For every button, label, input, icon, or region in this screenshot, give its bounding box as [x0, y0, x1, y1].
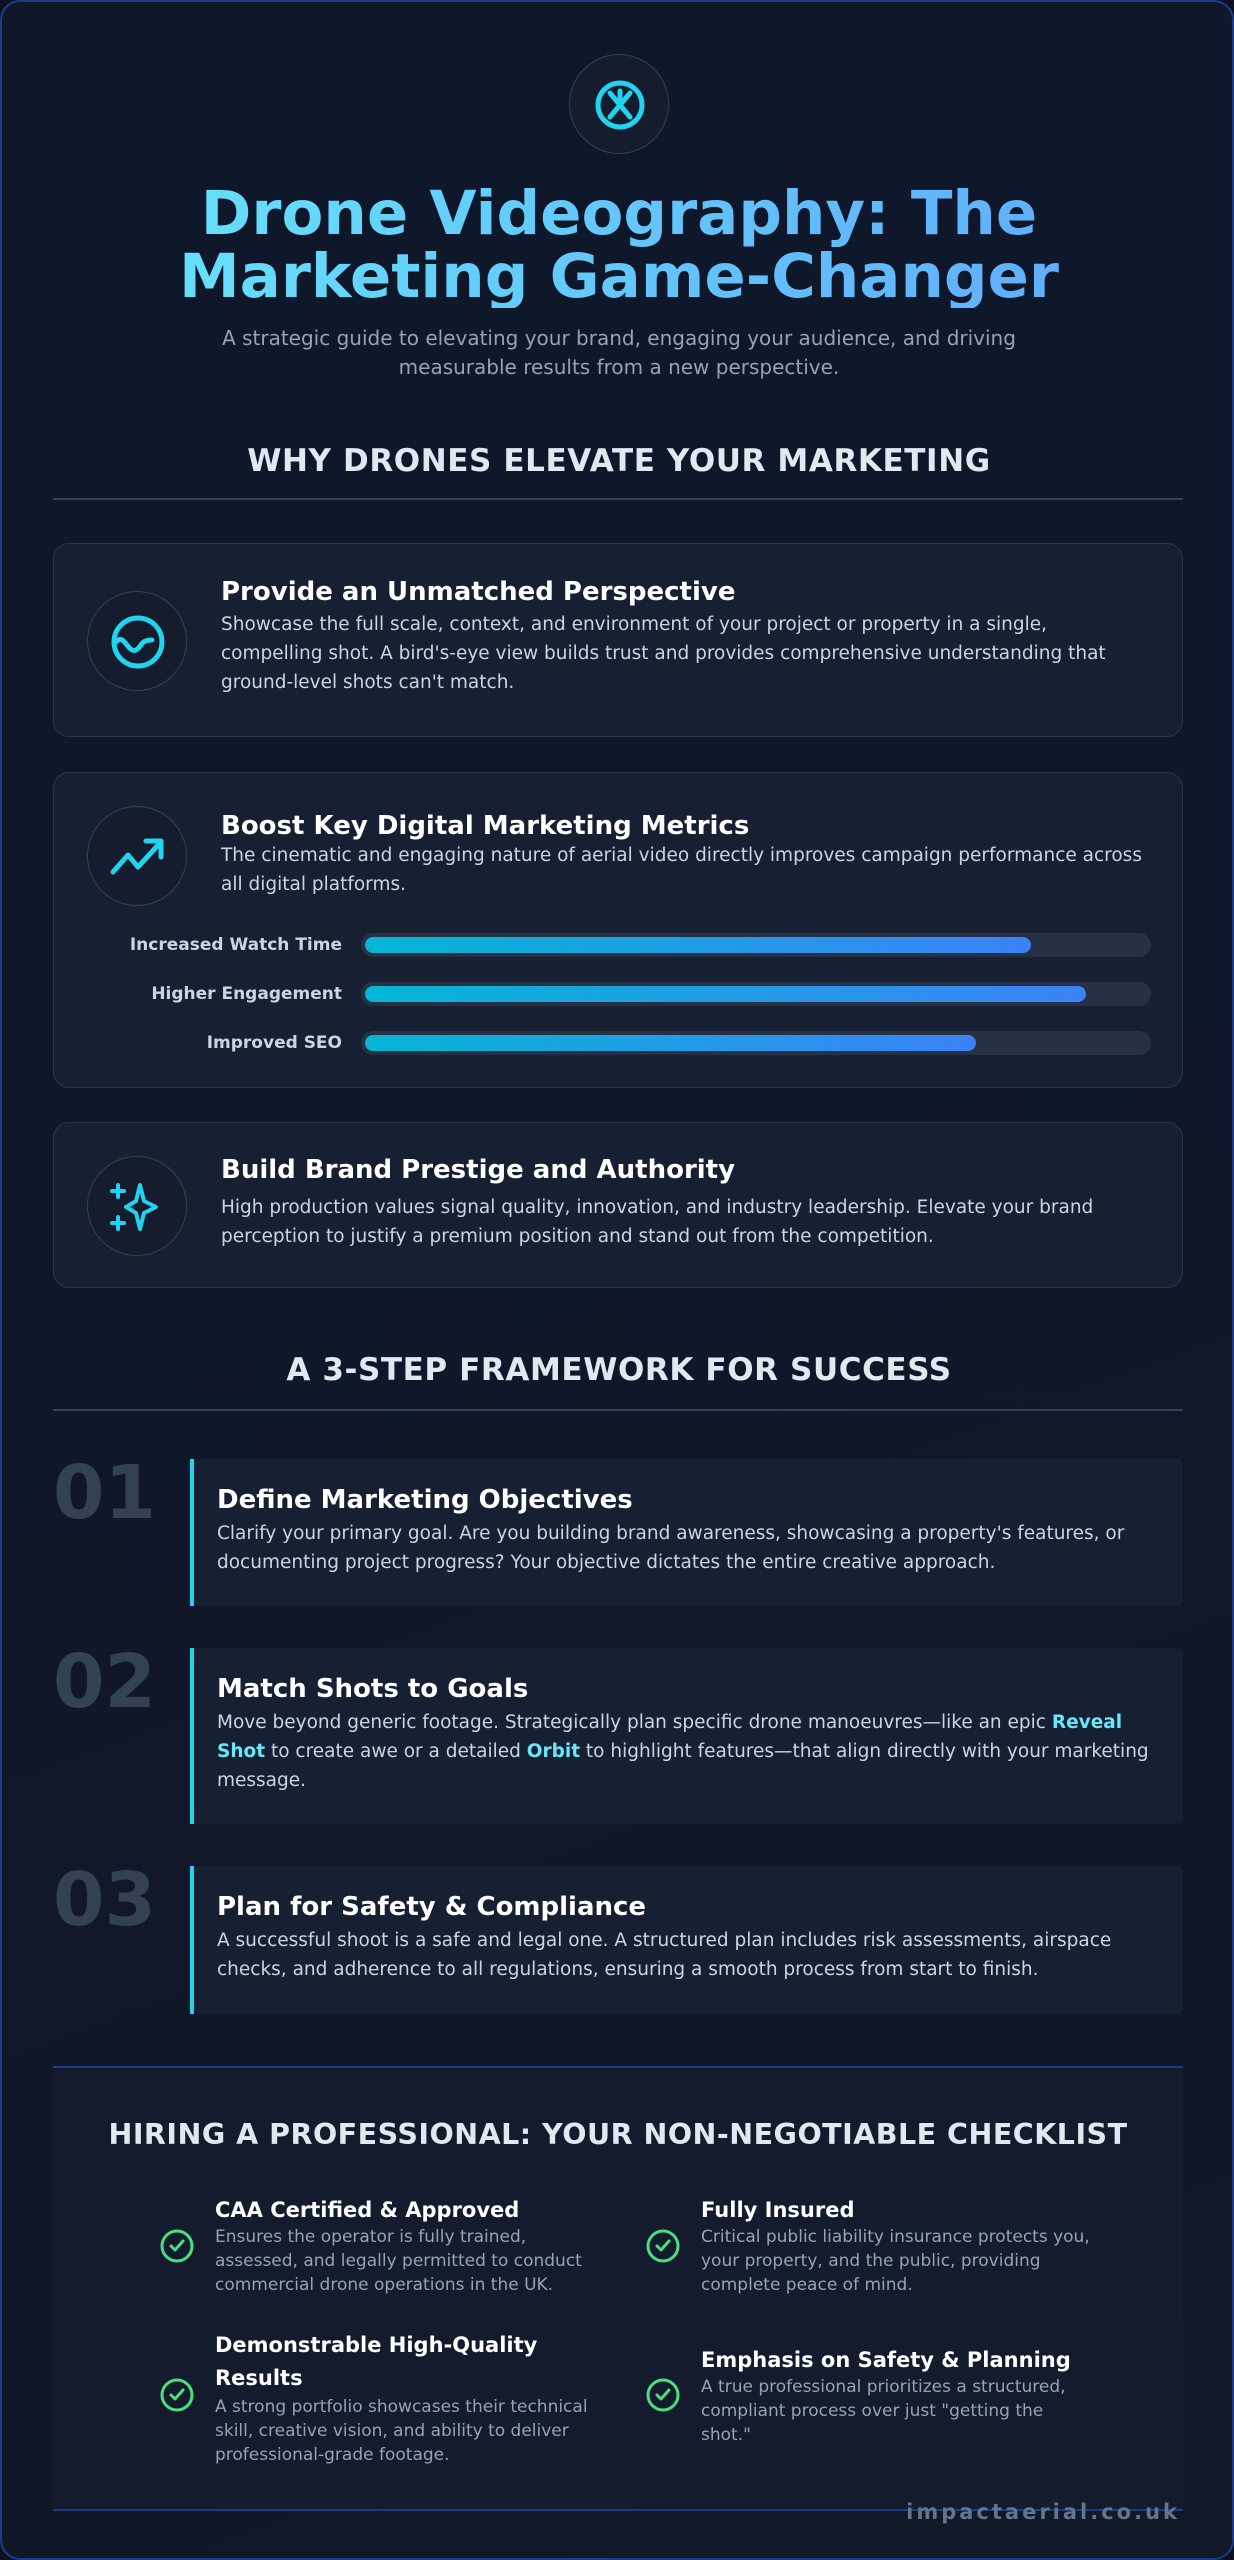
title: Marketing Game-Changer — [179, 241, 1059, 312]
text — [220, 811, 1142, 895]
icon: drone logo — [569, 54, 669, 154]
panel: brand prestige — [53, 1122, 1183, 1288]
subtitle: A strategic guide to elevating your brand, engaging your audience, and driving measurable results from a new perspective. — [222, 326, 1016, 379]
item: insured — [646, 2198, 1090, 2295]
heading: why drones: WHY DRONES ELEVATE YOUR MARKETING — [247, 443, 991, 479]
item: quality: Demonstrable High-Quality Results — [215, 2333, 537, 2390]
text: Showcase the full scale, context, and environment of your project or property in a single, compelling shot. A bird's-eye view builds trust and provides comprehensive understanding that ground-level shots can't match. — [221, 614, 1106, 693]
step box — [190, 1866, 1183, 2014]
item: safety — [646, 2348, 1071, 2445]
item: CAA: Ensures the operator is fully trained, assessed, and legally permitted to conduct commercial drone operations in the UK. — [215, 2227, 582, 2295]
item: insured: Fully Insured — [701, 2198, 854, 2222]
step box — [190, 1648, 1183, 1824]
text — [221, 577, 1106, 693]
text: Boost Key Digital Marketing Metrics — [221, 811, 749, 841]
panel: unmatched perspective — [53, 543, 1183, 737]
bar chart: Higher Engagement — [151, 984, 342, 1004]
icon: perspective — [87, 591, 187, 691]
step box: Clarify your primary goal. Are you building brand awareness, showcasing a property's features, or documenting project progress? Your objective dictates the entire creative approach. — [217, 1523, 1124, 1573]
step box: Match Shots to Goals — [217, 1674, 528, 1704]
panel: hiring checklist — [53, 2066, 1183, 2511]
text: High production values signal quality, innovation, and industry leadership. Elevate your brand perception to justify a premium position and stand out from the competition. — [221, 1197, 1093, 1247]
bar chart: Increased Watch Time — [130, 935, 342, 955]
step box — [190, 1459, 1183, 1606]
icon: sparkles — [87, 1156, 187, 1256]
icon: trending up — [87, 806, 187, 906]
step box: A successful shoot is a safe and legal one. A structured plan includes risk assessments, airspace checks, and adherence to all regulations, ensuring a smooth process from start to finish. — [217, 1930, 1111, 1980]
item: quality — [160, 2333, 588, 2465]
bar chart — [130, 933, 1151, 1055]
footer: website: impactaerial.co.uk — [906, 2500, 1180, 2524]
step 1 — [53, 1450, 1183, 1606]
step 3 — [53, 1857, 1183, 2014]
item: safety: Emphasis on Safety & Planning — [701, 2348, 1071, 2372]
step box: Plan for Safety & Compliance — [217, 1892, 646, 1922]
bar chart: Improved SEO — [207, 1033, 342, 1053]
item: CAA — [160, 2198, 582, 2295]
step box: Define Marketing Objectives — [217, 1485, 633, 1515]
step 2 — [53, 1639, 1183, 1824]
item: quality: A strong portfolio showcases their technical skill, creative vision, and ability to deliver professional-grade footage. — [215, 2397, 588, 2465]
title: Drone Videography: The — [201, 178, 1037, 249]
item: CAA: CAA Certified & Approved — [215, 2198, 519, 2222]
number: 01 — [53, 1450, 156, 1536]
text: Build Brand Prestige and Authority — [221, 1155, 735, 1185]
number: 02 — [53, 1639, 156, 1725]
item: insured: Critical public liability insurance protects you, your property, and the public, providing complete peace of mind. — [701, 2227, 1090, 2295]
panel: digital metrics — [53, 772, 1183, 1088]
text: Provide an Unmatched Perspective — [221, 577, 735, 607]
item: safety: A true professional prioritizes a structured, compliant process over just "getting the shot." — [701, 2377, 1066, 2445]
text: The cinematic and engaging nature of aerial video directly improves campaign performance across all digital platforms. — [221, 845, 1142, 895]
heading: framework: A 3-STEP FRAMEWORK FOR SUCCESS — [286, 1352, 952, 1388]
number: 03 — [53, 1857, 156, 1943]
title — [2, 182, 1234, 308]
heading: HIRING A PROFESSIONAL: YOUR NON-NEGOTIABLE CHECKLIST — [108, 2118, 1128, 2151]
step box: Move beyond generic footage. Strategically plan specific drone manoeuvres—like an epic Reveal Shot to create awe or a detailed Orbit to highlight features—that align directly with your marketing message. — [217, 1712, 1149, 1791]
text — [221, 1155, 1093, 1247]
